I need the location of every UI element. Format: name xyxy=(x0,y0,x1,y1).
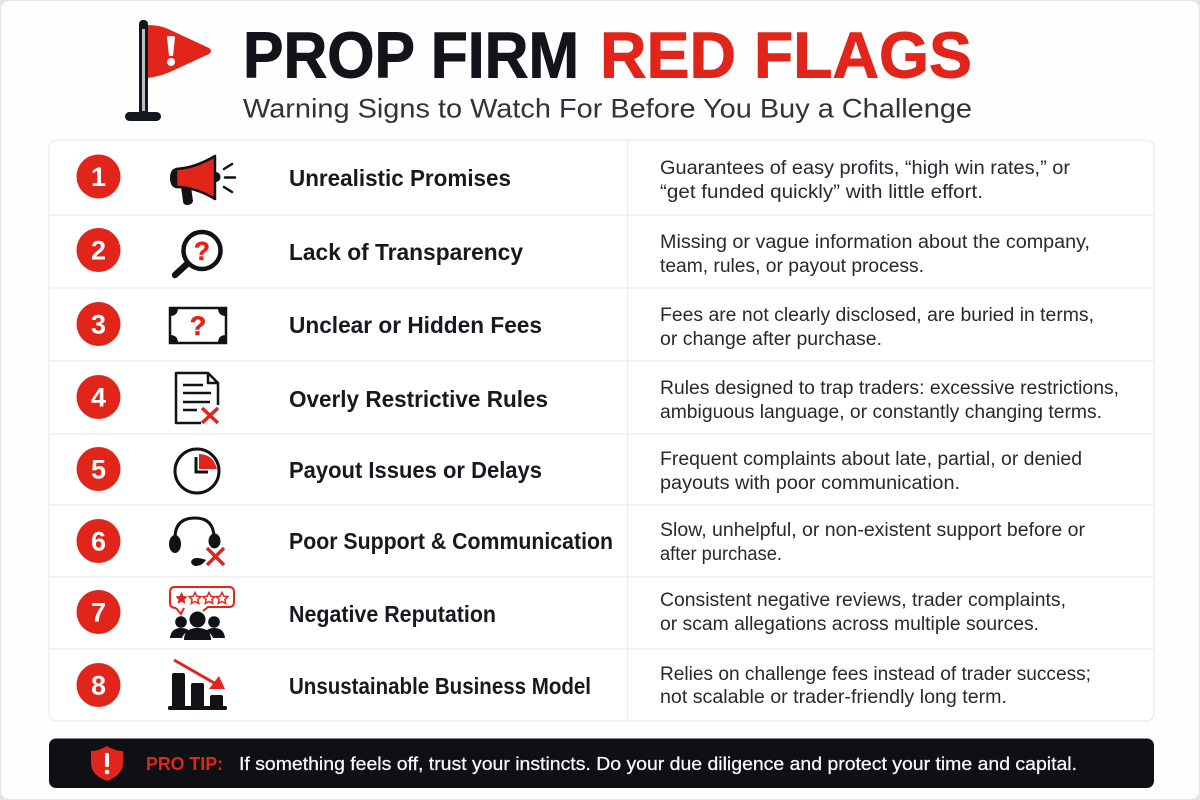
row 7: negative reputation: 7 xyxy=(91,598,106,628)
title: RED FLAGS xyxy=(600,18,972,92)
callout: pro tip bar: If something feels off, trust your instincts. Do your due diligence and protect your time and capital. xyxy=(239,754,1077,774)
row 8: unsustainable business model: Unsustainable Business Model xyxy=(289,673,591,699)
panel: red flags table xyxy=(49,140,1154,721)
row 5: payout issues xyxy=(76,447,1082,494)
icon: red warning flag xyxy=(125,20,211,121)
row 6: poor support: Slow, unhelpful, or non-existent support before or xyxy=(660,520,1086,541)
row 1: unrealistic promises: “get funded quickly” with little effort. xyxy=(660,182,983,203)
row 7: negative reputation xyxy=(76,587,1066,640)
row 6: poor support: 6 xyxy=(91,526,106,556)
row 4: restrictive rules: Overly Restrictive Rules xyxy=(289,386,548,412)
icon: falling bar chart xyxy=(168,660,227,710)
icon: banknote with question mark: ? xyxy=(190,311,206,341)
icon: magnifying glass with question mark xyxy=(175,232,220,275)
subtitle: Warning Signs to Watch For Before You Buy a Challenge xyxy=(243,94,972,124)
row 4: restrictive rules xyxy=(76,373,1119,423)
icon: document with red x xyxy=(176,373,218,423)
row 2: lack of transparency: Missing or vague information about the company, xyxy=(660,232,1090,253)
row 5: payout issues: payouts with poor communication. xyxy=(660,473,960,494)
row 1: unrealistic promises: 1 xyxy=(91,162,106,192)
icon: clock with red wedge xyxy=(175,449,219,493)
row 2: lack of transparency: 2 xyxy=(91,236,106,266)
row 6: poor support: Poor Support & Communication xyxy=(289,528,613,554)
row 1: unrealistic promises: Guarantees of easy profits, “high win rates,” or xyxy=(660,158,1071,179)
row 3: hidden fees: 3 xyxy=(91,310,106,340)
row 7: negative reputation: Negative Reputation xyxy=(289,601,496,627)
row 4: restrictive rules: Rules designed to trap traders: excessive restrictions, xyxy=(660,378,1119,399)
row 2: lack of transparency: Lack of Transparency xyxy=(289,239,523,265)
row 7: negative reputation: or scam allegations across multiple sources. xyxy=(660,614,1039,635)
title: PROP FIRM xyxy=(243,18,579,92)
row 7: negative reputation: Consistent negative reviews, trader complaints, xyxy=(660,590,1066,611)
icon: warning shield xyxy=(91,746,123,781)
row 6: poor support: after purchase. xyxy=(660,544,782,565)
icon: review bubble and people xyxy=(170,587,234,640)
row 4: restrictive rules: 4 xyxy=(91,382,106,412)
row 5: payout issues: Payout Issues or Delays xyxy=(289,457,542,483)
row 5: payout issues: Frequent complaints about late, partial, or denied xyxy=(660,449,1082,470)
row 3: hidden fees: Unclear or Hidden Fees xyxy=(289,312,542,338)
row 1: unrealistic promises xyxy=(76,154,1071,205)
row 3: hidden fees: or change after purchase. xyxy=(660,329,882,350)
row 8: unsustainable business model: not scalable or trader-friendly long term. xyxy=(660,687,1007,708)
row 5: payout issues: 5 xyxy=(91,454,106,484)
callout: pro tip bar xyxy=(49,738,1154,788)
icon: magnifying glass with question mark: ? xyxy=(194,236,210,266)
row 8: unsustainable business model: Relies on challenge fees instead of trader success; xyxy=(660,664,1091,685)
row 3: hidden fees xyxy=(76,302,1094,350)
row 2: lack of transparency xyxy=(76,228,1090,277)
row 8: unsustainable business model xyxy=(76,660,1091,710)
row 2: lack of transparency: team, rules, or payout process. xyxy=(660,256,924,277)
row 6: poor support xyxy=(76,518,1086,566)
icon: banknote with question mark xyxy=(170,308,226,343)
callout: pro tip bar: PRO TIP: xyxy=(146,754,223,774)
row 4: restrictive rules: ambiguous language, or constantly changing terms. xyxy=(660,402,1102,423)
row 3: hidden fees: Fees are not clearly disclosed, are buried in terms, xyxy=(660,305,1094,326)
row 8: unsustainable business model: 8 xyxy=(91,670,106,700)
row 1: unrealistic promises: Unrealistic Promises xyxy=(289,165,511,191)
icon: headset with red x xyxy=(169,518,224,566)
icon: megaphone xyxy=(170,156,235,205)
